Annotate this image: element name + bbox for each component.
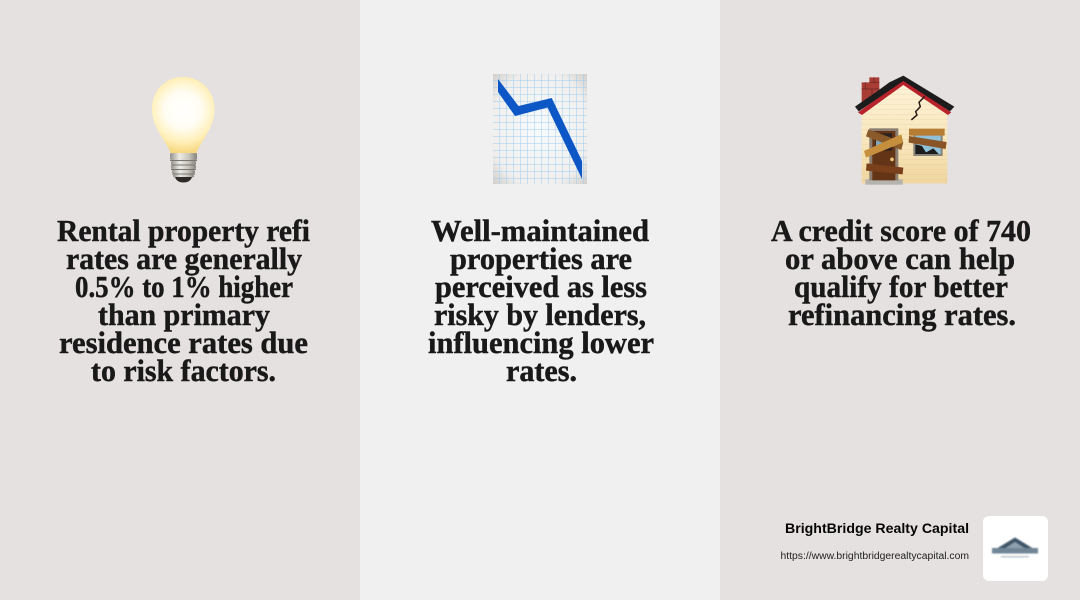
text: credit score: A credit score of 740 — [771, 213, 1031, 248]
text: well-maintained properties: perceived as less — [435, 269, 647, 304]
text: rental refi rates: than primary — [98, 297, 270, 332]
text: rental refi rates: rates are generally — [66, 241, 302, 276]
text: rental refi rates: to risk factors. — [91, 353, 276, 388]
website url: https://www.brightbridgerealtycapital.com — [780, 551, 969, 562]
logo tile — [983, 516, 1048, 581]
text: rental refi rates: 0.5% to 1% higher — [75, 269, 293, 304]
panel: well-maintained properties — [360, 0, 720, 600]
icon: falling chart — [493, 74, 587, 184]
text: rental refi rates — [57, 213, 310, 388]
text: credit score: qualify for better — [794, 269, 1008, 304]
text: credit score: or above can help — [785, 241, 1015, 276]
text: credit score — [771, 213, 1031, 332]
text: well-maintained properties: rates. — [506, 353, 577, 388]
text: well-maintained properties: influencing lower — [428, 325, 654, 360]
text: well-maintained properties: properties are — [450, 241, 632, 276]
text: rental refi rates: residence rates due — [59, 325, 308, 360]
icon: light bulb — [152, 77, 214, 182]
footer: company branding — [780, 516, 1048, 581]
panel: rental refi rates — [0, 0, 360, 600]
text: credit score: refinancing rates. — [788, 297, 1016, 332]
panel: credit score — [720, 0, 1080, 600]
text: well-maintained properties: Well-maintained — [431, 213, 649, 248]
company name: BrightBridge Realty Capital — [785, 521, 969, 536]
icon: boarded-up house — [855, 76, 954, 185]
text: well-maintained properties — [428, 213, 654, 388]
text: rental refi rates: Rental property refi — [57, 213, 310, 248]
text: well-maintained properties: risky by lenders, — [434, 297, 646, 332]
